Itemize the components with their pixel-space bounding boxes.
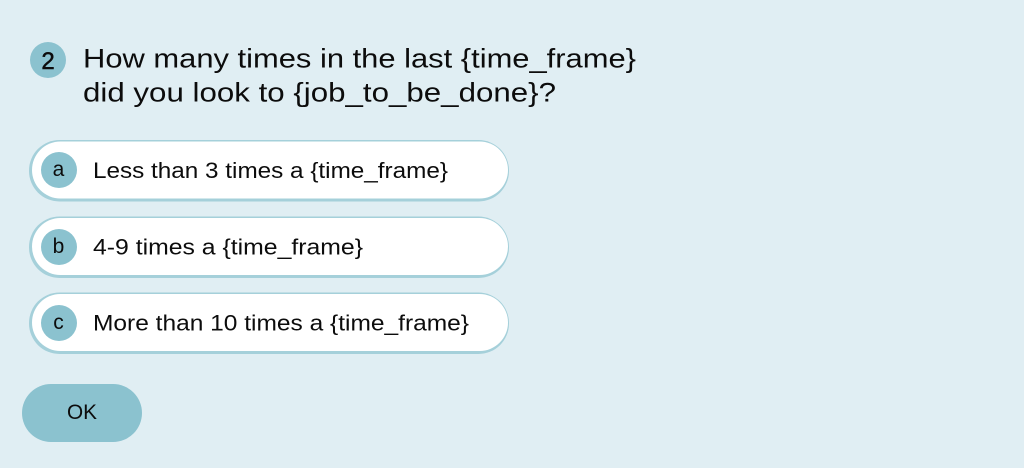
option c xyxy=(29,292,509,354)
option b badge xyxy=(41,229,77,265)
option c badge: c xyxy=(53,311,64,334)
OK button: OK xyxy=(67,401,97,424)
question heading: did you look to {job_to_be_done}? xyxy=(83,78,556,108)
question heading: How many times in the last {time_frame} xyxy=(83,44,636,74)
option b xyxy=(29,216,509,278)
option c badge xyxy=(41,305,77,341)
OK button xyxy=(22,384,142,442)
option a badge: a xyxy=(53,158,65,181)
option b label: 4-9 times a {time_frame} xyxy=(93,234,363,260)
question number badge xyxy=(30,42,66,78)
option c label: More than 10 times a {time_frame} xyxy=(93,310,469,336)
option b badge: b xyxy=(53,235,64,258)
option a badge xyxy=(41,152,77,188)
question number badge: 2 xyxy=(41,48,55,75)
option a label: Less than 3 times a {time_frame} xyxy=(93,158,448,183)
question heading xyxy=(83,44,636,108)
option a xyxy=(29,140,509,202)
